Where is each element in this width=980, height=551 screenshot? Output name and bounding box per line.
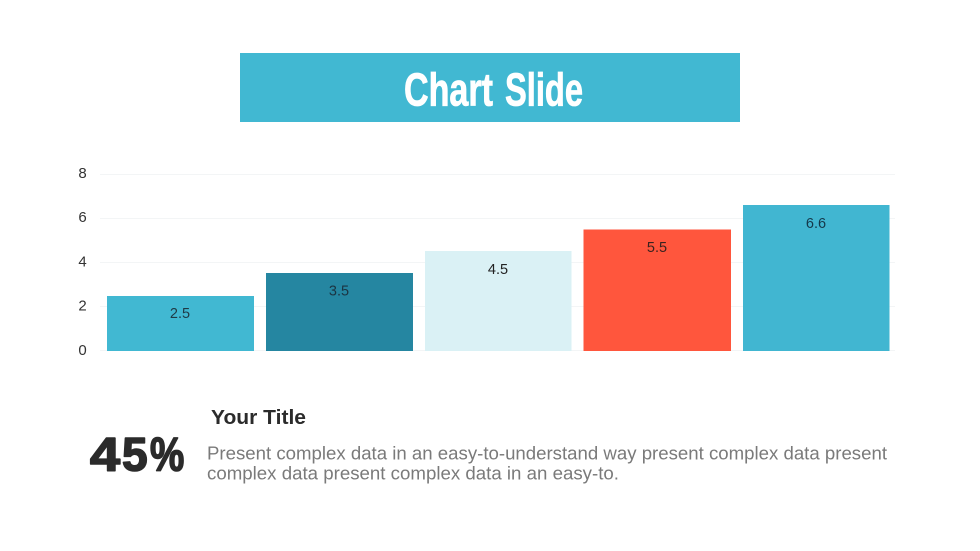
bar: 5.5 (584, 230, 731, 351)
body text: complex data present complex data in an easy-to. (207, 462, 619, 484)
heading: Your Title (211, 407, 306, 429)
bar: 4.5: 4.5 (488, 262, 508, 278)
title: Slide (505, 64, 583, 116)
bar: 3.5: 3.5 (329, 284, 349, 300)
big percentage: 4 (90, 428, 120, 481)
y axis labels: 4 (78, 254, 87, 270)
title (404, 64, 583, 116)
text block (207, 407, 887, 484)
bar: 2.5: 2.5 (170, 306, 190, 322)
bar: 4.5 (425, 251, 572, 351)
body text (207, 442, 887, 484)
title banner (240, 53, 740, 122)
y axis labels: 8 (78, 165, 87, 182)
bar: 3.5 (266, 273, 413, 351)
y axis labels: 6 (78, 209, 87, 226)
body text: Present complex data in an easy-to-understand way present complex data present (207, 442, 887, 464)
big percentage: 5 (122, 428, 148, 481)
title: Chart (404, 64, 493, 116)
big percentage (90, 428, 184, 481)
y axis labels (78, 165, 87, 359)
big percentage: % (150, 429, 184, 481)
bar: 6.6: 6.6 (806, 216, 826, 232)
bar: 5.5: 5.5 (647, 240, 667, 256)
bar chart (78, 165, 895, 359)
y axis labels: 2 (78, 298, 87, 314)
bar: 6.6 (743, 205, 890, 351)
y axis labels: 0 (78, 342, 87, 359)
bar: 2.5 (107, 296, 254, 351)
